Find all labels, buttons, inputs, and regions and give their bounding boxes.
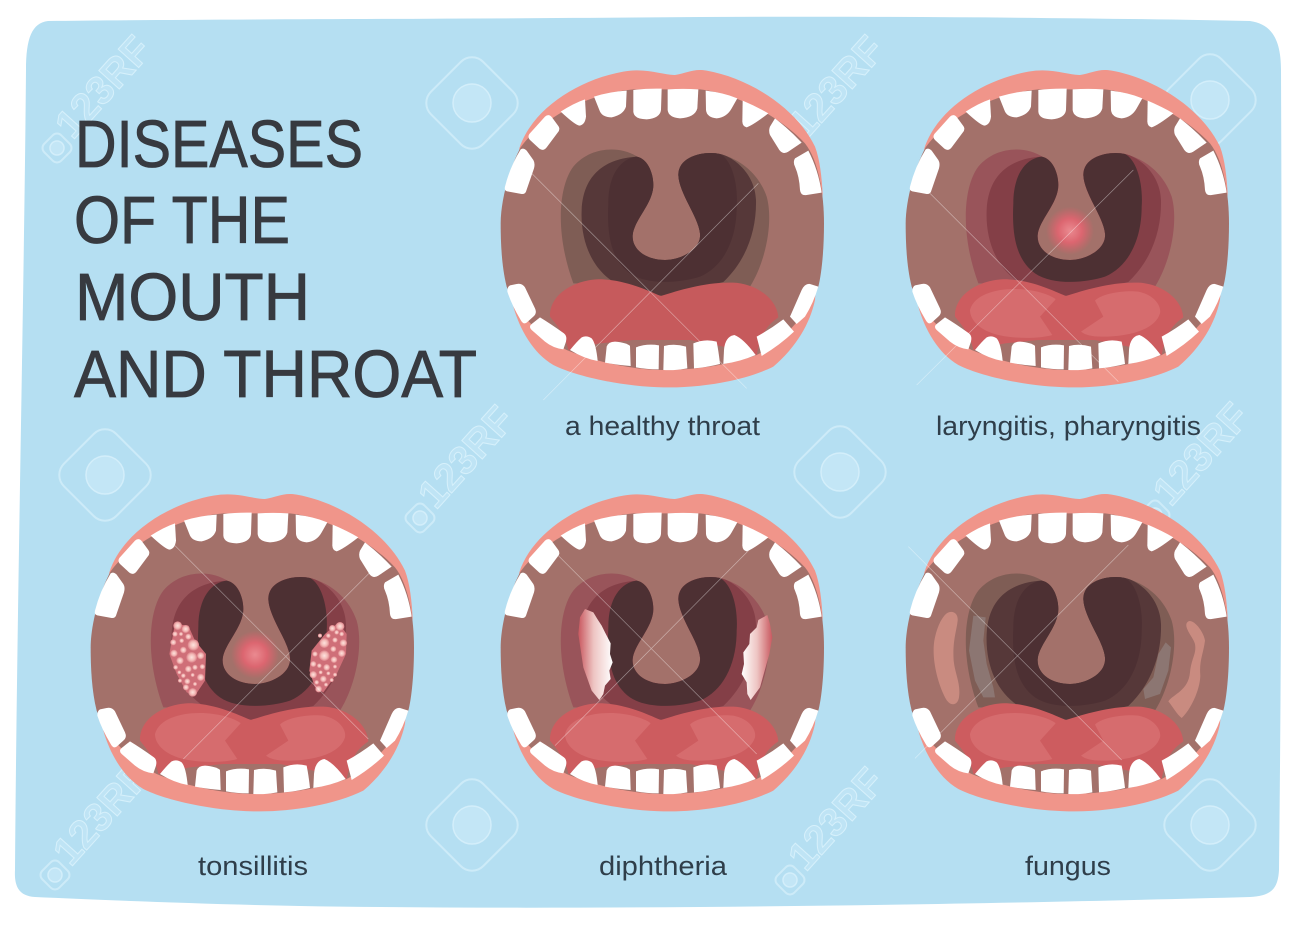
right diphtheria patch bbox=[742, 615, 772, 700]
lips bbox=[513, 494, 823, 811]
title bbox=[74, 107, 477, 412]
label: tonsillitis: tonsillitis bbox=[198, 851, 308, 881]
tongue bbox=[140, 703, 368, 779]
left diphtheria patch bbox=[578, 609, 613, 700]
inflamed spot bbox=[231, 631, 279, 679]
mouth cavity bbox=[501, 513, 824, 794]
title: OF THE bbox=[74, 183, 290, 258]
teeth bbox=[95, 513, 412, 794]
mouth cavity bbox=[501, 89, 824, 370]
pink fungal patches bbox=[934, 612, 1205, 718]
lips bbox=[918, 494, 1228, 811]
throat bbox=[966, 574, 1174, 720]
teeth bbox=[910, 89, 1227, 370]
label: fungus: fungus bbox=[1025, 851, 1111, 881]
illustration: a healthy throat bbox=[501, 70, 824, 400]
illustration: fungus bbox=[906, 494, 1229, 811]
lips bbox=[918, 70, 1228, 387]
label: laryngitis, pharyngitis: laryngitis, pharyngitis bbox=[936, 411, 1201, 441]
mouth cavity bbox=[91, 513, 414, 794]
lips bbox=[513, 70, 823, 387]
right tonsil spots bbox=[309, 622, 347, 692]
inflamed throat bbox=[966, 150, 1174, 296]
mouth cavity bbox=[906, 89, 1229, 370]
teeth bbox=[505, 89, 822, 370]
illustration: tonsillitis bbox=[91, 494, 414, 811]
teeth bbox=[910, 513, 1227, 794]
tongue bbox=[955, 703, 1183, 779]
inflamed throat bbox=[151, 574, 359, 720]
lips bbox=[103, 494, 413, 811]
illustration: diphtheria bbox=[501, 494, 824, 811]
grey fungal patches bbox=[969, 616, 1171, 699]
inflamed spot bbox=[1046, 207, 1094, 255]
label: diphtheria: diphtheria bbox=[599, 851, 728, 881]
inflamed throat bbox=[561, 574, 769, 720]
tongue bbox=[550, 279, 778, 355]
tongue bbox=[550, 703, 778, 779]
illustration: laryngitis, pharyngitis bbox=[906, 70, 1229, 387]
title: AND THROAT bbox=[74, 337, 477, 412]
mouth cavity bbox=[906, 513, 1229, 794]
throat bbox=[561, 150, 769, 296]
title: MOUTH bbox=[75, 260, 310, 335]
title: DISEASES bbox=[75, 107, 363, 182]
teeth bbox=[505, 513, 822, 794]
left tonsil spots bbox=[169, 621, 206, 697]
label: a healthy throat: a healthy throat bbox=[565, 411, 761, 441]
tongue bbox=[955, 279, 1183, 355]
